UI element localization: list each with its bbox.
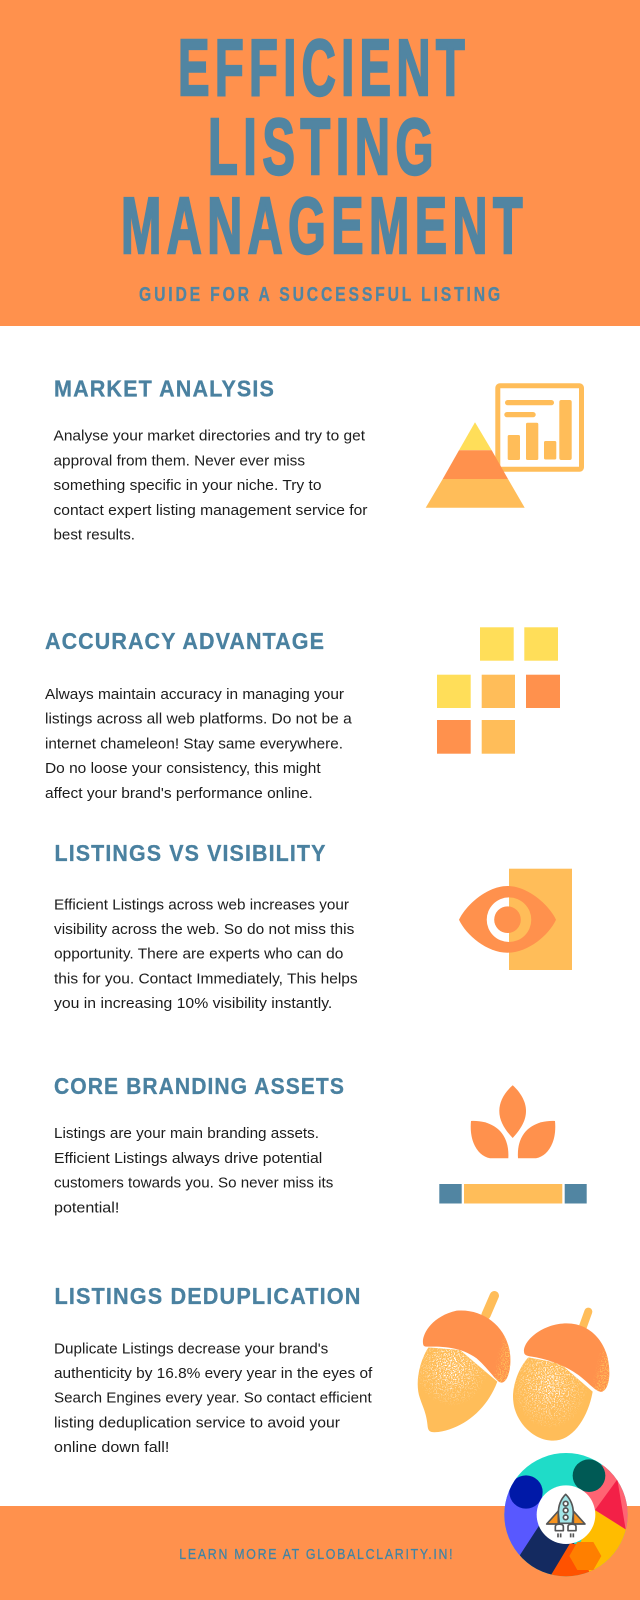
title: LISTING: [208, 102, 439, 191]
panel: listings deduplication: [54, 1283, 612, 1456]
footer text: LEARN MORE AT GLOBALCLARITY.IN!: [179, 1547, 454, 1563]
text: listings vs visibility body: this for you. Contact Immediately, This helps: [54, 970, 358, 987]
text: accuracy advantage body: internet chameleon! Stay same everywhere.: [45, 735, 343, 752]
icon: rocket logo: [504, 1453, 628, 1576]
panel: market analysis: [54, 376, 582, 544]
text: accuracy advantage body: [45, 686, 352, 802]
text: accuracy advantage body: Do no loose your consistency, this might: [45, 760, 321, 777]
heading: listings deduplication: LISTINGS DEDUPLICATION: [54, 1283, 362, 1309]
text: accuracy advantage body: affect your brand's performance online.: [45, 785, 313, 802]
panel: listings vs visibility: [54, 840, 572, 1012]
panel: accuracy advantage: [45, 627, 560, 802]
text: market analysis body: best results.: [54, 527, 135, 544]
icon: acorns: [418, 1291, 610, 1441]
text: listings deduplication body: listing deduplication service to avoid your: [54, 1414, 340, 1431]
text: core branding assets body: Listings are your main branding assets.: [54, 1125, 319, 1142]
subtitle: GUIDE FOR A SUCCESSFUL LISTING: [139, 284, 503, 306]
panel: core branding assets: [54, 1073, 587, 1216]
text: market analysis body: [54, 428, 368, 544]
text: market analysis body: something specific in your niche. Try to: [54, 477, 322, 494]
icon: eye: [459, 869, 572, 970]
text: listings deduplication body: authenticity by 16.8% every year in the eyes of: [54, 1365, 373, 1382]
text: listings deduplication body: Search Engines every year. So contact efficient: [54, 1390, 372, 1407]
text: listings deduplication body: online down fall!: [54, 1439, 169, 1456]
heading: core branding assets: CORE BRANDING ASSETS: [54, 1073, 345, 1099]
text: core branding assets body: potential!: [54, 1199, 119, 1216]
icon: colored squares: [437, 627, 560, 754]
text: core branding assets body: customers towards you. So never miss its: [54, 1175, 334, 1192]
text: listings deduplication body: [54, 1340, 373, 1456]
heading: listings vs visibility: LISTINGS VS VISIBILITY: [54, 840, 326, 866]
text: listings deduplication body: Duplicate Listings decrease your brand's: [54, 1340, 329, 1357]
title: [121, 23, 528, 270]
text: accuracy advantage body: listings across all web platforms. Do not be a: [45, 711, 352, 728]
heading: accuracy advantage: ACCURACY ADVANTAGE: [45, 628, 325, 654]
text: listings vs visibility body: you in increasing 10% visibility instantly.: [54, 995, 332, 1012]
text: listings vs visibility body: [54, 896, 358, 1012]
text: accuracy advantage body: Always maintain accuracy in managing your: [45, 686, 344, 703]
text: listings vs visibility body: opportunity. There are experts who can do: [54, 946, 343, 963]
icon: pyramid and bar chart: [426, 386, 582, 508]
icon: leaves on bar: [439, 1085, 587, 1204]
text: market analysis body: contact expert listing management service for: [54, 502, 368, 519]
footer banner: [0, 1506, 640, 1600]
text: core branding assets body: [54, 1125, 334, 1216]
rocket: [547, 1494, 585, 1537]
text: listings vs visibility body: visibility across the web. So do not miss this: [54, 921, 355, 938]
header banner: [0, 0, 640, 326]
text: listings vs visibility body: Efficient Listings across web increases your: [54, 896, 349, 913]
heading: market analysis: MARKET ANALYSIS: [54, 376, 275, 402]
text: core branding assets body: Efficient Listings always drive potential: [54, 1150, 322, 1167]
text: market analysis body: approval from them. Never ever miss: [54, 452, 305, 469]
text: market analysis body: Analyse your market directories and try to get: [54, 428, 366, 445]
